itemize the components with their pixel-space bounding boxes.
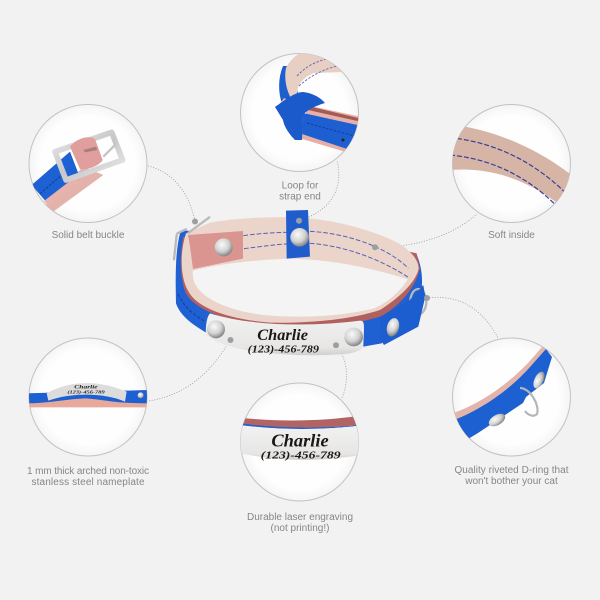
label: engraving line 1: Durable laser engraving bbox=[247, 512, 353, 523]
pink strap end bbox=[188, 231, 243, 269]
detail circle: D-ring bbox=[450, 338, 570, 456]
dotted leader lines bbox=[148, 160, 498, 401]
detail circle: nameplate: Charlie bbox=[74, 384, 98, 390]
label: strap end: strap end bbox=[279, 192, 321, 202]
blue stitching bbox=[243, 231, 408, 277]
pink strap rivet bbox=[215, 238, 233, 256]
detail circle: engraving bbox=[240, 383, 360, 501]
buckle bbox=[174, 217, 209, 259]
label: nameplate line 2: stanless steel nameplate bbox=[32, 477, 145, 488]
nameplate bbox=[206, 313, 364, 355]
engraved phone: (123)-456-789 bbox=[248, 345, 319, 356]
D-ring strap bbox=[379, 285, 425, 345]
detail circle: nameplate bbox=[28, 338, 148, 456]
label: D-ring line 1: Quality riveted D-ring that bbox=[454, 465, 569, 476]
loop rivet bbox=[290, 228, 309, 247]
label: D-ring line 2: won't bother your cat bbox=[464, 476, 558, 487]
detail circle: engraving: Charlie bbox=[271, 431, 329, 451]
label: engraving line 2: (not printing!) bbox=[271, 523, 329, 534]
label: loop: Loop for bbox=[282, 180, 319, 192]
detail circle: loop bbox=[240, 52, 362, 172]
label: belt buckle: Solid belt buckle bbox=[52, 230, 125, 241]
blue keeper loop bbox=[286, 210, 310, 259]
nameplate right rivet bbox=[344, 328, 363, 346]
collar inner opening bbox=[193, 259, 408, 317]
anchor dots bbox=[192, 218, 430, 348]
label: soft inside: Soft inside bbox=[488, 230, 535, 241]
main collar bbox=[174, 210, 426, 356]
label: nameplate line 1: 1 mm thick arched non-toxic bbox=[27, 466, 149, 477]
detail circle: belt buckle bbox=[29, 104, 147, 222]
engraved name: Charlie bbox=[257, 327, 308, 344]
fleece lining bbox=[182, 217, 419, 323]
band stitching bbox=[178, 294, 204, 321]
D-ring rivet bbox=[385, 317, 401, 338]
collar blue outer band bbox=[176, 231, 422, 347]
detail circle: soft inside bbox=[450, 104, 573, 222]
D-ring bbox=[410, 289, 426, 314]
nameplate left rivet bbox=[207, 320, 225, 338]
detail circle: nameplate: (123)-456-789 bbox=[67, 389, 106, 394]
red trim bbox=[181, 227, 420, 328]
detail circle: engraving: (123)-456-789 bbox=[261, 449, 341, 461]
